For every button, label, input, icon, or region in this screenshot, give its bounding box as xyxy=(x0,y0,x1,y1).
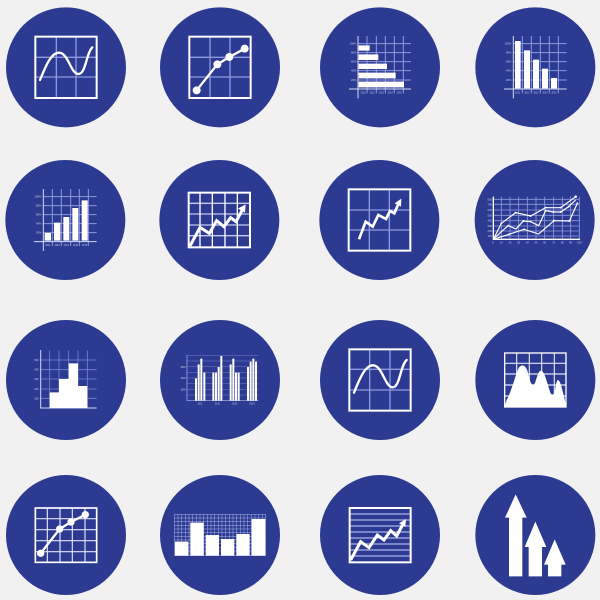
icon: ascending column chart: 2015 xyxy=(82,245,88,247)
icon: descending column chart xyxy=(475,7,595,127)
icon: descending column chart: 40% xyxy=(506,69,512,73)
icon: grouped column chart xyxy=(160,320,280,440)
icon: descending column chart: 60% xyxy=(506,60,512,64)
icon: grouped column chart: 2011 xyxy=(197,403,203,405)
icon: multi-line chart: 40 xyxy=(526,241,529,245)
icon: curve chart in large grid xyxy=(6,7,126,127)
icon: multi-line chart: 80 xyxy=(561,241,564,245)
icon: descending column chart: 80% xyxy=(506,51,512,55)
icon: multi-line chart xyxy=(475,160,595,280)
icon: grouped column chart: 3000 xyxy=(180,367,186,369)
icon: horizontal bar chart xyxy=(320,7,440,127)
icon: multi-line chart: 70 xyxy=(552,241,556,245)
icon: descending column chart: 2014 xyxy=(542,93,548,95)
icon: descending column chart: 100% xyxy=(505,42,512,46)
icon: horizontal bar chart: 2013 xyxy=(379,93,385,95)
icon: grouped column chart: 2013 xyxy=(232,403,238,405)
icon: multi-line chart: 10 xyxy=(500,241,503,245)
icon: dots line chart on dense grid xyxy=(6,475,126,595)
icon: stepped histogram xyxy=(6,320,126,440)
icon: descending column chart: 2011 xyxy=(515,93,521,95)
icon: rising arrow on large grid xyxy=(319,160,439,280)
icon: grouped column chart: 1000 xyxy=(180,389,186,391)
icon: ascending column chart: 2011 xyxy=(45,245,51,247)
icon: ascending column chart: 20% xyxy=(36,231,42,235)
icon: horizontal bar chart: 20% xyxy=(351,78,357,82)
icon: multi-line chart: 300 xyxy=(488,224,493,228)
icon: curve chart, third row xyxy=(320,320,440,440)
icon: horizontal bar chart: 100% xyxy=(350,42,357,46)
icon: multi-line chart: 600 xyxy=(488,208,493,212)
icon: horizontal bar chart: 2011 xyxy=(361,93,366,95)
icon: descending column chart: 2015 xyxy=(551,93,557,95)
icon: ascending column chart: 80% xyxy=(36,204,42,208)
icon: multi-line chart: 50 xyxy=(535,241,538,245)
icon: three up arrows xyxy=(475,475,595,595)
icon: ascending column chart: 2012 xyxy=(55,245,61,247)
icon: line chart with dots xyxy=(160,7,280,127)
icon: ascending column chart: 40% xyxy=(36,222,42,226)
icon: ascending column chart xyxy=(5,160,125,280)
icon: horizontal bar chart: 40% xyxy=(351,69,357,73)
icon: multi-line chart: 90 xyxy=(569,241,573,245)
icon: ascending column chart: 2013 xyxy=(64,245,70,247)
icon: grouped column chart: 2012 xyxy=(215,403,221,405)
icon: multi-line chart: 400 xyxy=(488,219,493,223)
icon: horizontal bar chart: 80% xyxy=(351,51,357,55)
icon: ascending column chart: 2014 xyxy=(73,245,79,247)
icon: horizontal bar chart: 2012 xyxy=(370,93,376,95)
icon: multi-line chart: 20 xyxy=(509,241,512,245)
icon: multi-line chart: 200 xyxy=(488,229,493,233)
icon: multi-line chart: 100 xyxy=(488,234,493,238)
icon: multi-line chart: 100 xyxy=(577,241,582,245)
icon: ascending column chart: 100% xyxy=(35,195,42,199)
icon: stepped histogram: 400 xyxy=(34,368,39,372)
icon: multi-line chart: 700 xyxy=(488,202,493,206)
icon: multi-line chart: 60 xyxy=(543,241,547,245)
icon: stepped histogram: 200 xyxy=(34,387,39,391)
icon: grouped column chart: 2000 xyxy=(180,378,186,380)
icon: bar chart on fine grid xyxy=(160,475,280,595)
icon: multi-line chart: 0 xyxy=(492,241,494,245)
icon: ascending column chart: 60% xyxy=(36,213,42,217)
icon: horizontal bar chart: 2015 xyxy=(397,93,403,95)
icon: stepped histogram: 100 xyxy=(34,396,39,400)
icon: grouped column chart: 2014 xyxy=(249,403,255,405)
icon: stepped histogram: 300 xyxy=(34,377,39,381)
icon: multi-line chart: 500 xyxy=(488,213,493,217)
icon: multi-line chart: 800 xyxy=(488,197,493,201)
icon: horizontal bar chart: 2014 xyxy=(388,93,394,95)
icon: horizontal bar chart: 60% xyxy=(351,60,357,64)
icon: rising arrow on dense grid xyxy=(159,160,279,280)
icon: multi-line chart: 30 xyxy=(517,241,521,245)
icon: stepped histogram: 500 xyxy=(34,358,39,362)
icon: rising arrow on horizontal lines xyxy=(320,475,440,595)
icon: descending column chart: 2012 xyxy=(524,93,530,95)
icon: descending column chart: 2013 xyxy=(533,93,539,95)
icon: descending column chart: 20% xyxy=(506,78,512,82)
icon: area chart xyxy=(475,320,595,440)
